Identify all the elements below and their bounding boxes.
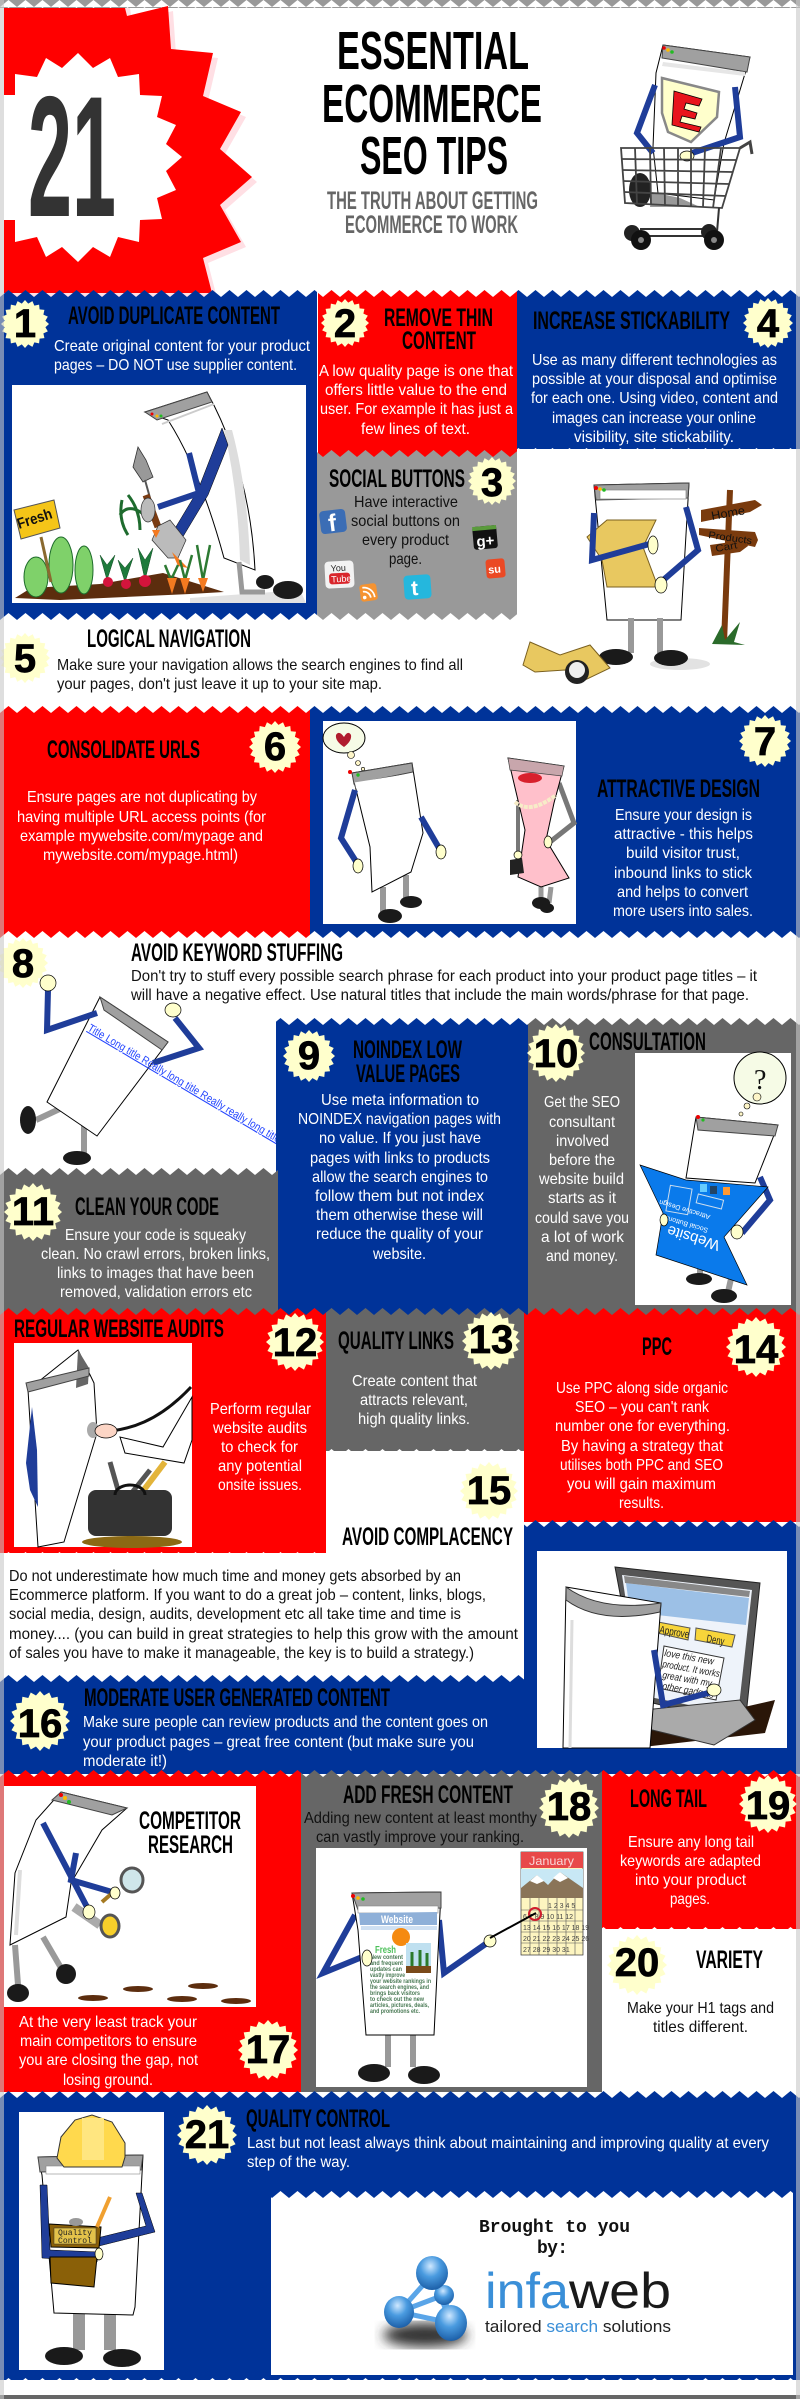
panel: 6 consolidate urls [0, 706, 310, 938]
illustration: two page characters [323, 721, 576, 924]
panel: 7 attractive design [310, 706, 800, 938]
illustration: page with calendar: brings back visitors [370, 1991, 421, 1997]
illustration: page with calendar: and promotions etc. [370, 2009, 420, 2015]
badge 1: 1 [14, 302, 36, 346]
text block: could save you [535, 1210, 629, 1227]
heading: NOINDEX LOW [353, 1036, 462, 1064]
text block: mywebsite.com/mypage.html) [43, 847, 238, 864]
text block: them otherwise these will [316, 1207, 483, 1224]
illustration: page reviewing on laptop: other gadgets [661, 1681, 715, 1701]
text block [247, 2135, 769, 2171]
heading: PPC [642, 1333, 672, 1361]
panel: 2 remove thin content [318, 290, 517, 457]
badge 14: 14 [734, 1328, 779, 1372]
text block: your pages, don't just leave it up to your site map. [57, 676, 382, 693]
illustration: page with magnifier [4, 1786, 256, 2007]
text block [298, 1092, 501, 1263]
panel: 17 competitor research [0, 1770, 301, 2092]
text block: pages. [670, 1891, 710, 1908]
text block: Ensure pages are not duplicating by [27, 789, 257, 806]
badge 1 [1, 300, 49, 348]
text block: utilises both PPC and SEO [560, 1457, 723, 1474]
logo: infaweb wordmark: tailored search solutions [485, 2317, 671, 2336]
badge 4 [743, 298, 793, 348]
panel: 13 quality links [326, 1308, 524, 1451]
text block: your product pages – great free content (but make sure you [83, 1734, 474, 1751]
heading: CLEAN YOUR CODE [75, 1193, 219, 1221]
panel: 11 clean your code [0, 1168, 278, 1315]
panel: 3 social buttons [317, 450, 517, 620]
panel: 14 ppc [524, 1308, 800, 1522]
badge 12: 12 [273, 1321, 317, 1365]
illustration: page reviewing on laptop: product. It works [661, 1659, 721, 1680]
illustration: page with long title [20, 975, 283, 1165]
text block: social buttons on [351, 513, 460, 530]
badge 11 [4, 1183, 62, 1241]
title: ESSENTIAL [337, 21, 529, 81]
badge 20 [607, 1935, 667, 1995]
text block [41, 1227, 270, 1301]
text block: Create content that [352, 1373, 478, 1390]
heading: LOGICAL NAVIGATION [87, 625, 251, 653]
text block: and helps to convert [617, 884, 749, 901]
text block: keywords are adapted [620, 1853, 761, 1870]
illustration: page in hard hat: Control [58, 2237, 92, 2246]
text block: page. [389, 551, 422, 568]
text block [535, 1094, 629, 1265]
illustration: page with calendar: 6 7 8 9 10 11 12 [523, 1914, 573, 1921]
badge 17 [238, 2020, 298, 2080]
illustration: page with long title: Title Long title Really long title Really really long title [85, 1022, 283, 1146]
panel: 21 quality control [0, 2091, 800, 2385]
badge 19 [739, 1775, 797, 1833]
text block: pages with links to products [310, 1150, 490, 1167]
text block: moderate it!) [83, 1753, 167, 1770]
badge 14 [726, 1317, 786, 1377]
title: ECOMMERCE [322, 74, 542, 134]
text block: before the [549, 1152, 615, 1169]
text block: you will gain maximum [567, 1476, 716, 1493]
badge 5: 5 [14, 637, 36, 681]
text: brought to you by: by: [537, 2239, 568, 2259]
text block: clean. No crawl errors, broken links, [41, 1246, 270, 1263]
illustration: page with calendar: Website [381, 1914, 413, 1926]
text block: money.... (you can build in great strategies to help this grow with the amount [9, 1626, 519, 1643]
badge 16 [10, 1691, 70, 1751]
panel: 20 variety [602, 1927, 800, 2092]
badge 10: 10 [534, 1032, 578, 1076]
text block [130, 968, 758, 1004]
illustration: page reviewing on laptop: Deny [705, 1633, 726, 1648]
text block: any potential [218, 1458, 302, 1475]
heading: VALUE PAGES [356, 1060, 460, 1088]
icon: facebook: f [327, 510, 339, 537]
heading: REGULAR WEBSITE AUDITS [14, 1315, 224, 1343]
icon: youtube: Tube [331, 573, 352, 584]
panel: 15 avoid complacency [0, 1449, 524, 1678]
heading: CONTENT [402, 327, 476, 355]
heading: MODERATE USER GENERATED CONTENT [84, 1684, 390, 1712]
heading: CONSOLIDATE URLS [47, 736, 200, 764]
badge 8 [0, 938, 48, 988]
illustration: page in hard hat [19, 2112, 164, 2370]
heading: REMOVE THIN [384, 304, 493, 332]
text block: for each one. Using video, content and [531, 390, 778, 407]
illustration: page holding website plan [635, 1052, 791, 1305]
logo: infaweb wordmark: infa [485, 2263, 569, 2319]
text block: user. For example it has just a [320, 401, 513, 418]
badge 18 [539, 1778, 599, 1838]
panel: 10 consultation [527, 1018, 800, 1315]
panel: 9 noindex low value pages [276, 1018, 528, 1315]
text block: offers little value to the end [325, 382, 507, 399]
text block: possible at your disposal and optimise [532, 371, 777, 388]
heading: QUALITY CONTROL [246, 2105, 390, 2133]
white starburst [4, 53, 182, 262]
badge 19: 19 [746, 1784, 790, 1828]
illustration: page holding website plan: Attractive Design [658, 1198, 711, 1220]
heading: AVOID DUPLICATE CONTENT [68, 302, 280, 330]
text block: involved [556, 1133, 609, 1150]
illustration: page with map and signpost: Home [710, 503, 746, 523]
text block: consultant [549, 1114, 616, 1131]
text block: reduce the quality of your [316, 1226, 484, 1243]
illustration: page with calendar: 27 28 29 30 31 [523, 1947, 570, 1954]
badge 11: 11 [12, 1190, 54, 1234]
text block: A low quality page is one that [319, 363, 514, 380]
badge 4: 4 [757, 302, 780, 346]
illustration: page with calendar: to check out the new [370, 1997, 424, 2003]
text block: inbound links to stick [614, 865, 753, 882]
panel: 16 moderate user generated content [0, 1520, 800, 1774]
logo: infaweb wordmark [485, 2263, 671, 2336]
text block [555, 1380, 730, 1512]
text block: every product [362, 532, 449, 549]
logo: infaweb molecule [383, 2256, 467, 2347]
badge 10 [527, 1024, 585, 1082]
badge 2 [321, 299, 369, 347]
text block: pages – DO NOT use supplier content. [54, 357, 297, 374]
text block: you are closing the gap, not [19, 2052, 199, 2069]
text block: more users into sales. [613, 903, 753, 920]
text block: Perform regular [210, 1401, 312, 1418]
text block [319, 363, 514, 438]
text block [613, 807, 753, 920]
text block: can vastly improve your ranking. [316, 1829, 524, 1846]
badge 3 [468, 457, 516, 505]
illustration: page with calendar: the search engines, and [370, 1985, 429, 1991]
illustration: page holding website plan: Social Buttons [664, 1213, 709, 1233]
text block: Ensure your code is squeaky [65, 1227, 246, 1244]
heading: VARIETY [696, 1946, 763, 1974]
panel: 18 add fresh content [301, 1770, 602, 2092]
illustration: page with map and signpost: Cart [715, 540, 738, 555]
subtitle: ECOMMERCE TO WORK [345, 211, 518, 239]
text block: will have a negative effect. Use natural titles that include the main words/phrase for that page. [130, 987, 749, 1004]
panel: 12 regular website audits [0, 1308, 326, 1553]
heading: LONG TAIL [630, 1785, 707, 1813]
text block: main competitors to ensure [20, 2033, 197, 2050]
panel: 1 avoid duplicate content [0, 290, 317, 620]
text block [304, 1810, 537, 1846]
illustration: page with calendar: your website rankings in [370, 1979, 431, 1985]
text block [57, 657, 463, 693]
text block: Use meta information to [321, 1092, 479, 1109]
badge 3: 3 [481, 461, 503, 505]
badge 13: 13 [469, 1318, 513, 1362]
text block: no value. If you just have [319, 1130, 481, 1147]
text block: website. [372, 1246, 426, 1263]
text block: Create original content for your product [54, 338, 311, 355]
text block: Ensure any long tail [628, 1834, 754, 1851]
icon: twitter: t [410, 577, 419, 600]
text block: Do not underestimate how much time and money gets absorbed by an [9, 1568, 461, 1585]
text block: SEO – you can't rank [575, 1399, 710, 1416]
text block: removed, validation errors etc [60, 1284, 252, 1301]
text block [627, 2000, 774, 2036]
text block: few lines of text. [361, 421, 470, 438]
illustration: page with calendar: vastly improve [370, 1973, 406, 1979]
logo: infaweb wordmark: web [568, 2263, 671, 2319]
text block: Last but not least always think about maintaining and improving quality at every [247, 2135, 769, 2152]
illustration: page with calendar: articles, pictures, deals, [370, 2003, 429, 2009]
text block: Ecommerce platform. If you want to do a great job – content, links, blogs, [9, 1587, 486, 1604]
text block: a lot of work [541, 1229, 625, 1246]
badge 8: 8 [12, 942, 34, 986]
badge 7: 7 [754, 720, 776, 764]
heading [139, 1807, 241, 1859]
text block: Have interactive [354, 494, 458, 511]
text block: Use as many different technologies as [532, 352, 777, 369]
badge 6: 6 [264, 725, 286, 769]
illustration: page with calendar: New content [370, 1955, 403, 1961]
icon: google plus [472, 525, 498, 551]
illustration: page in hard hat: Quality [58, 2229, 92, 2238]
text block: allow the search engines to [312, 1169, 488, 1186]
badge 20: 20 [615, 1941, 659, 1985]
heading [353, 1036, 462, 1088]
icon: twitter [403, 574, 432, 601]
illustration: page with calendar: Fresh [375, 1945, 396, 1956]
illustration: gardener: Fresh [15, 506, 54, 533]
text block [352, 1373, 478, 1428]
heading: RESEARCH [148, 1831, 233, 1859]
title [322, 21, 542, 186]
heading: COMPETITOR [139, 1807, 241, 1835]
badge 15 [460, 1462, 518, 1520]
badge 17: 17 [246, 2028, 290, 2072]
heading: ADD FRESH CONTENT [343, 1781, 513, 1809]
text block [531, 352, 778, 446]
text block [351, 494, 460, 568]
illustration: page with calendar: 20 21 22 23 24 25 26 [523, 1936, 589, 1943]
red starburst [4, 6, 252, 293]
icon: page character in shopping cart [621, 45, 752, 250]
text block [54, 338, 311, 374]
panel: 4 increase stickability [517, 290, 800, 455]
heading: CONSULTATION [589, 1028, 706, 1056]
icon: stumbleupon [485, 558, 506, 579]
text block [83, 1714, 488, 1770]
illustration: page with map and signpost: Products [708, 530, 753, 547]
text block [19, 2014, 199, 2089]
text block: attractive - this helps [614, 826, 753, 843]
text block: links to images that have been [57, 1265, 254, 1282]
text block: website build [538, 1171, 624, 1188]
illustration: page with calendar [316, 1848, 589, 2087]
illustration: page with calendar: 1 2 3 4 5 [548, 1903, 575, 1910]
panel: header [0, 0, 800, 298]
text block: attracts relevant, [360, 1392, 468, 1409]
panel: 8 avoid keyword stuffing [0, 931, 800, 1165]
text block: Don't try to stuff every possible search phrase for each product into your product page titles – it [131, 968, 758, 985]
badge 12 [266, 1313, 324, 1371]
illustration: page holding website plan: ? [754, 1065, 766, 1096]
text block: At the very least track your [19, 2014, 198, 2031]
heading [384, 304, 493, 355]
text block [17, 789, 267, 864]
text block: Use PPC along side organic [556, 1380, 728, 1397]
icon: youtube: You [330, 563, 346, 573]
panel: sponsor [271, 2191, 793, 2375]
title: SEO TIPS [360, 126, 508, 186]
panel: header: 21 [28, 61, 116, 253]
illustration: page with map and signpost [523, 483, 762, 684]
text block: to check for [221, 1439, 299, 1456]
heading: SOCIAL BUTTONS [329, 465, 465, 493]
icon: rss [359, 583, 378, 602]
icon: google plus: g+ [476, 532, 495, 551]
badge 2: 2 [334, 302, 356, 346]
text block: into your product [635, 1872, 747, 1889]
illustration: gardener [12, 385, 306, 603]
text block: starts as it [548, 1190, 617, 1207]
text block: Make sure people can review products and the content goes on [83, 1714, 488, 1731]
text block: titles different. [653, 2019, 748, 2036]
text block: Make your H1 tags and [627, 2000, 774, 2017]
text block: social media, design, audits, development etc all take time and time is [9, 1606, 461, 1623]
text block: NOINDEX navigation pages with [298, 1111, 501, 1128]
badge 9: 9 [298, 1034, 320, 1078]
illustration: doctor examining page [14, 1343, 192, 1548]
subtitle: THE TRUTH ABOUT GETTING [327, 187, 538, 215]
icon: youtube [324, 560, 355, 589]
heading: QUALITY LINKS [338, 1327, 454, 1355]
text block: step of the way. [247, 2154, 350, 2171]
subtitle [327, 187, 538, 239]
text block [9, 1568, 519, 1662]
text block: results. [619, 1495, 664, 1512]
text block: Ensure your design is [615, 807, 752, 824]
text block: Adding new content at least monthy [304, 1810, 537, 1827]
illustration: page reviewing on laptop: love this new [663, 1648, 715, 1668]
text block: By having a strategy that [561, 1438, 724, 1455]
badge 9 [283, 1030, 335, 1082]
text: brought to you by: Brought to you [479, 2218, 630, 2238]
text block: website audits [212, 1420, 307, 1437]
text block: visibility, site stickability. [574, 429, 734, 446]
illustration: page reviewing on laptop [537, 1551, 787, 1748]
text block: having multiple URL access points (for [17, 809, 267, 826]
icon: facebook [319, 508, 348, 538]
badge 5 [0, 633, 50, 683]
badge 7 [739, 715, 791, 767]
text block: number one for everything. [555, 1418, 730, 1435]
badge 13 [462, 1312, 520, 1370]
text block: high quality links. [358, 1411, 470, 1428]
icon: stumbleupon: su [488, 564, 502, 577]
panel: 5 logical navigation [0, 483, 762, 693]
illustration: page reviewing on laptop: great with my [661, 1670, 713, 1690]
badge 21: 21 [185, 2113, 229, 2157]
illustration: page with calendar: January [529, 1854, 574, 1868]
illustration: page with calendar: updates can [370, 1967, 402, 1973]
text block: example mywebsite.com/mypage and [20, 828, 263, 845]
badge 16: 16 [18, 1702, 62, 1746]
badge 18: 18 [547, 1785, 591, 1829]
panel: 19 long tail [602, 1770, 800, 1929]
text block: images can increase your online [552, 410, 756, 427]
illustration: page reviewing on laptop: Approve [658, 1624, 690, 1641]
badge 6 [249, 721, 301, 773]
text block: follow them but not index [315, 1188, 484, 1205]
illustration: page with calendar: 13 14 15 16 17 18 19 [523, 1925, 589, 1932]
text block: and money. [546, 1248, 618, 1265]
text block: build visitor trust, [626, 845, 740, 862]
heading: AVOID KEYWORD STUFFING [131, 939, 343, 967]
text block: Get the SEO [544, 1094, 620, 1111]
text block: of sales you have to make it manageable, the key is to build a strategy.) [9, 1645, 474, 1662]
text block: Make sure your navigation allows the search engines to find all [57, 657, 463, 674]
badge 21 [177, 2105, 237, 2165]
text block [210, 1401, 312, 1494]
starburst shadow [4, 8, 257, 298]
illustration: page holding website plan: Website [665, 1222, 722, 1254]
badge 15: 15 [467, 1469, 511, 1513]
text: brought to you by [479, 2218, 630, 2259]
illustration: page with calendar: and frequent [370, 1961, 403, 1967]
text block [620, 1834, 761, 1908]
heading: AVOID COMPLACENCY [342, 1523, 513, 1551]
text block: onsite issues. [218, 1477, 302, 1494]
text block: losing ground. [63, 2072, 153, 2089]
